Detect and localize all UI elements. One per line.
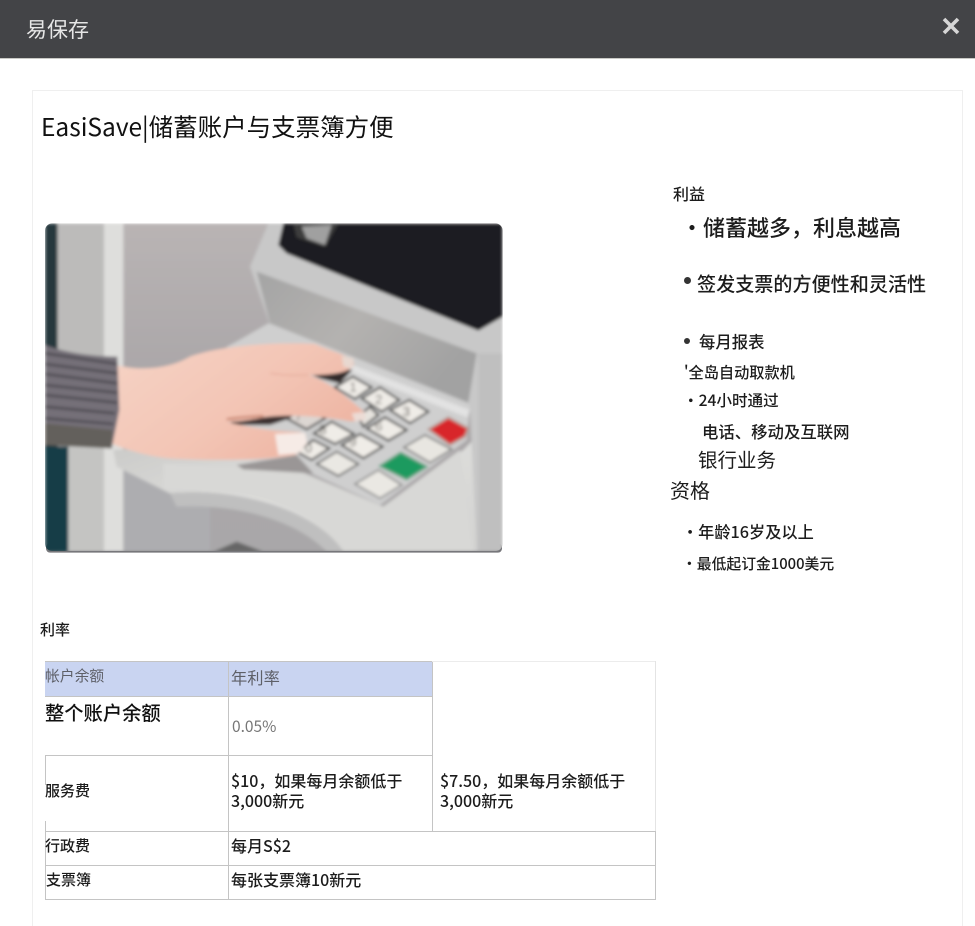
table: rates and fees <box>45 661 656 900</box>
panel: eligibility <box>670 475 834 574</box>
benefit: phone mobile internet: 电话、移动及互联网 <box>702 419 850 443</box>
row label: admin fee: 行政费 <box>45 835 90 856</box>
heading: EasiSave|储蓄账户与支票簿方便 <box>41 109 394 144</box>
header title: 易保存 <box>26 14 89 44</box>
table header cells <box>45 662 432 696</box>
benefit: statement: 每月报表 <box>699 329 765 353</box>
keypad surface <box>225 323 470 505</box>
image: hand at ATM keypad: 0 <box>305 442 312 456</box>
value: chequebook: 每张支票簿10新元 <box>231 867 361 891</box>
benefit: saving: ・储蓄越多，利息越高 <box>681 211 901 243</box>
value: service fee 2: 3,000新元 <box>440 788 513 812</box>
value: service fee 1: 3,000新元 <box>231 788 304 812</box>
value: admin fee: 每月S$2 <box>231 833 291 857</box>
benefit: 24 hours: ・24小时通过 <box>683 389 779 411</box>
image: hand at ATM keypad: 6 <box>375 419 382 434</box>
panel under screen <box>257 272 477 403</box>
row label: chequebook: 支票簿 <box>46 869 91 890</box>
hand shadows <box>237 455 313 473</box>
image: hand at ATM keypad: 7 <box>295 410 302 424</box>
rates heading: 利率 <box>40 619 70 640</box>
eligibility heading: 资格 <box>670 475 710 504</box>
sleeve <box>45 345 119 448</box>
keypad digits: 1 <box>349 380 357 395</box>
icon: close <box>942 18 960 34</box>
keys <box>335 377 372 399</box>
hand <box>112 343 365 460</box>
panel: benefits <box>673 181 926 473</box>
row label: whole balance: 整个账户余额 <box>45 698 161 726</box>
image: hand at ATM keypad: 9 <box>349 436 356 450</box>
image: hand at ATM keypad: 8 <box>319 423 326 437</box>
value: service fee 1 <box>231 768 402 812</box>
value: service fee 2 <box>440 768 625 812</box>
value: service fee 1: $10，如果每月余额低于 <box>231 768 402 792</box>
eligibility: deposit: ・最低起订金1000美元 <box>682 553 834 574</box>
benefit: banking: 银行业务 <box>698 444 776 473</box>
image: hand at ATM keypad <box>45 223 503 553</box>
screen <box>278 223 503 331</box>
header bar <box>0 0 975 59</box>
benefit: cheque: 签发支票的方便性和灵活性 <box>697 269 926 297</box>
upper console frame <box>250 224 502 526</box>
lower console <box>114 442 478 551</box>
benefit: ATM: '全岛自动取款机 <box>684 361 795 383</box>
row label: service fee: 服务费 <box>45 780 90 801</box>
value: rate: 0.05% <box>232 715 276 737</box>
header: annual rate: 年利率 <box>231 665 280 689</box>
benefits heading: 利益 <box>673 181 705 205</box>
eligibility: age: ・年龄16岁及以上 <box>682 519 814 543</box>
wall <box>45 223 503 552</box>
image: hand at ATM keypad: 2 <box>375 392 382 407</box>
header: account balance: 帐户余额 <box>45 665 104 686</box>
image: hand at ATM keypad: 3 <box>403 404 410 419</box>
value: service fee 2: $7.50，如果每月余额低于 <box>440 768 625 792</box>
